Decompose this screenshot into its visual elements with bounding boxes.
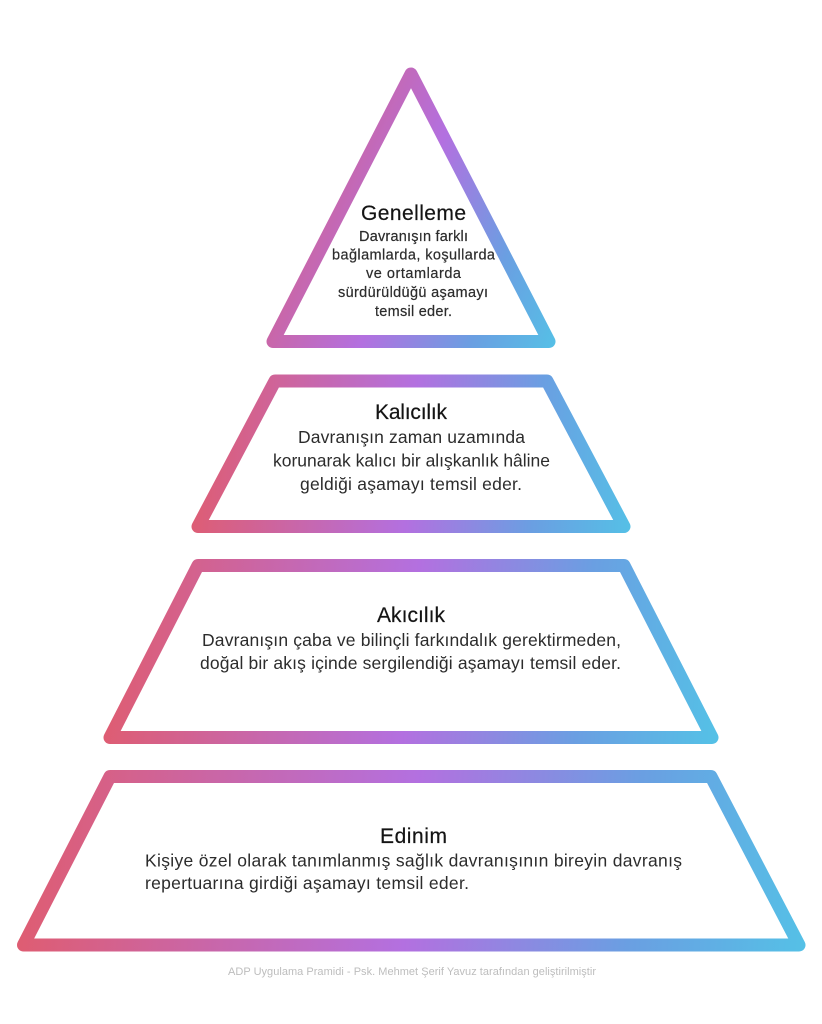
text block: Kalıcılık description: geldiği aşamayı temsil eder. xyxy=(300,474,522,494)
trapezoid outline xyxy=(24,776,799,945)
panel: Edinim pyramid tier xyxy=(24,776,799,945)
text block: Genelleme description: temsil eder. xyxy=(375,304,452,320)
text block: Kalıcılık description xyxy=(273,427,550,494)
trapezoid outline xyxy=(198,381,624,526)
text block: Genelleme description: Davranışın farklı xyxy=(359,229,468,245)
text block: Kalıcılık description: Davranışın zaman uzamında xyxy=(298,427,525,447)
panel: Akıcılık pyramid tier xyxy=(110,566,712,738)
heading: Edinim: Edinim xyxy=(380,825,447,848)
heading: Kalıcılık: Kalıcılık xyxy=(375,401,448,424)
text block: Edinim description: repertuarına girdiği aşamayı temsil eder. xyxy=(145,873,469,893)
text block: Genelleme description: sürdürüldüğü aşamayı xyxy=(338,285,488,301)
text block: Genelleme description: bağlamlarda, koşullarda xyxy=(332,248,496,264)
text block: Akıcılık description: doğal bir akış içinde sergilendiği aşamayı temsil eder. xyxy=(200,653,621,673)
panel: Kalıcılık pyramid tier xyxy=(198,381,624,526)
panel: Genelleme pyramid tier xyxy=(273,74,549,342)
text block: Edinim description xyxy=(145,850,682,893)
text block: Edinim description: Kişiye özel olarak tanımlanmış sağlık davranışının bireyin davranış xyxy=(145,850,682,870)
triangle outline xyxy=(273,74,549,342)
trapezoid outline xyxy=(110,566,712,738)
heading: Genelleme: Genelleme xyxy=(361,202,466,225)
footer credit: ADP Uygulama Pramidi - Psk. Mehmet Şerif Yavuz tarafından geliştirilmiştir xyxy=(228,966,596,978)
text block: Akıcılık description xyxy=(200,630,621,673)
text block: Genelleme description: ve ortamlarda xyxy=(366,266,462,282)
text block: Kalıcılık description: korunarak kalıcı bir alışkanlık hâline xyxy=(273,450,550,470)
text block: Akıcılık description: Davranışın çaba ve bilinçli farkındalık gerektirmeden, xyxy=(202,630,621,650)
heading: Akıcılık: Akıcılık xyxy=(377,604,446,627)
text block: Genelleme description xyxy=(332,229,496,320)
